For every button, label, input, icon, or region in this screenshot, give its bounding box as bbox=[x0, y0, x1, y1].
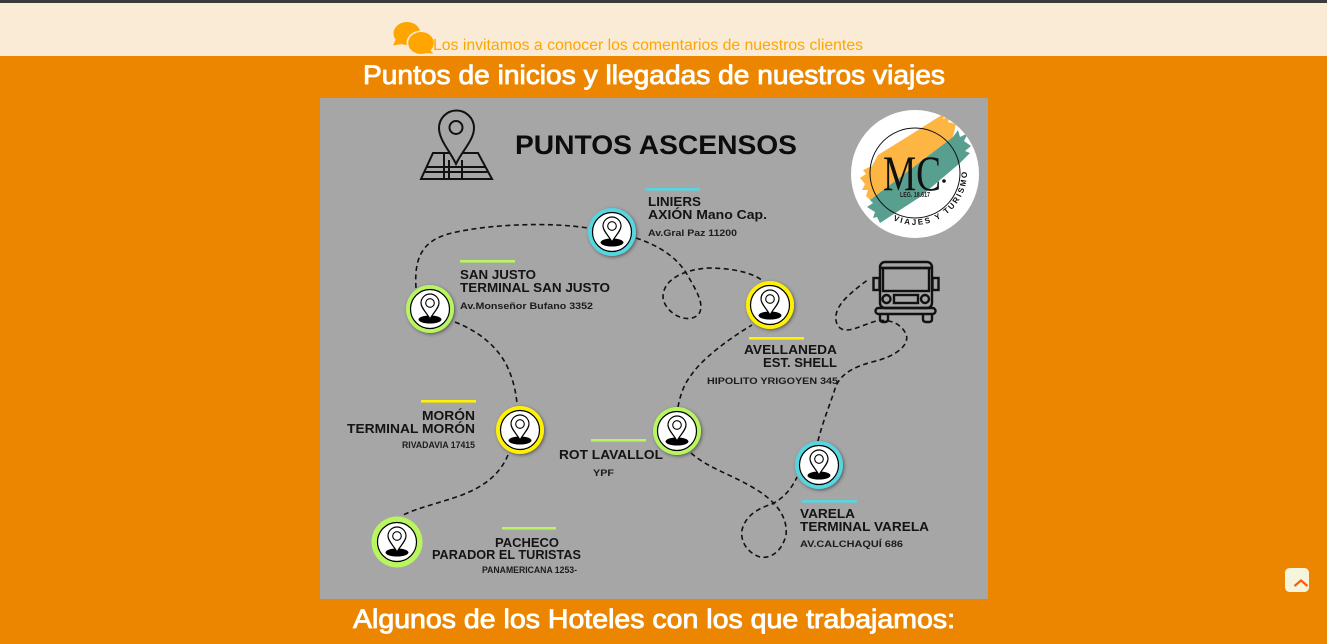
stop: Morón: TERMINAL MORÓN bbox=[347, 421, 475, 436]
stop: Avellaneda: HIPOLITO YRIGOYEN 345 bbox=[707, 376, 839, 387]
stop: Rot Lavallol: ROT LAVALLOL bbox=[559, 447, 663, 462]
stop: Pacheco: PARADOR EL TURISTAS bbox=[432, 547, 581, 562]
stop: Avellaneda bbox=[707, 281, 839, 387]
stop: San Justo bbox=[406, 260, 610, 333]
stop: Rot Lavallol bbox=[559, 407, 701, 479]
icon: map pin on map bbox=[421, 110, 492, 179]
stop: San Justo: TERMINAL SAN JUSTO bbox=[460, 280, 610, 295]
stop: Varela: VARELA bbox=[800, 506, 856, 521]
logo: MC viajes y turismo: VIAJES Y TURISMO bbox=[894, 172, 967, 225]
logo: MC viajes y turismo: MC bbox=[883, 145, 941, 201]
stop: Liniers bbox=[588, 188, 767, 256]
logo: MC viajes y turismo: LEG. 18.617 bbox=[900, 192, 930, 199]
stop: Avellaneda: EST. SHELL bbox=[763, 355, 837, 370]
stop: Avellaneda: AVELLANEDA bbox=[744, 342, 838, 357]
stop: Varela: AV.CALCHAQUÍ 686 bbox=[800, 539, 903, 550]
stop: Morón: RIVADAVIA 17415 bbox=[402, 440, 476, 451]
comments banner bbox=[0, 3, 1327, 56]
stop: Rot Lavallol: YPF bbox=[593, 468, 614, 479]
top dark bar bbox=[0, 0, 1327, 3]
banner text: Los invitamos a conocer los comentarios de nuestros clientes bbox=[433, 37, 863, 54]
stop: Morón bbox=[347, 400, 544, 454]
stop: Liniers: LINIERS bbox=[648, 194, 701, 209]
logo: MC viajes y turismo bbox=[851, 110, 979, 238]
stop: Liniers: AXIÓN Mano Cap. bbox=[648, 207, 767, 222]
title: puntos ascensos: PUNTOS ASCENSOS bbox=[515, 130, 797, 160]
icon: bus bbox=[874, 262, 938, 322]
stop: San Justo: SAN JUSTO bbox=[460, 267, 536, 282]
stop: Varela: TERMINAL VARELA bbox=[800, 519, 930, 534]
stop: Pacheco: PACHECO bbox=[495, 535, 559, 550]
stop: Pacheco bbox=[372, 516, 581, 576]
stop: Liniers: Av.Gral Paz 11200 bbox=[648, 228, 737, 239]
back to top button bbox=[1285, 568, 1309, 592]
heading: hoteles: Algunos de los Hoteles con los que trabajamos: bbox=[353, 604, 955, 634]
stop: Pacheco: PANAMERICANA 1253- bbox=[482, 565, 577, 576]
stop: San Justo: Av.Monseñor Bufano 3352 bbox=[460, 301, 593, 312]
stop: Morón: MORÓN bbox=[422, 408, 475, 423]
icon: speech bubbles bbox=[393, 22, 436, 56]
panel: map of boarding points bbox=[320, 98, 988, 599]
dashed route lines bbox=[403, 225, 907, 557]
heading: puntos de inicios: Puntos de inicios y llegadas de nuestros viajes bbox=[363, 60, 945, 90]
stop: Varela bbox=[795, 441, 930, 550]
